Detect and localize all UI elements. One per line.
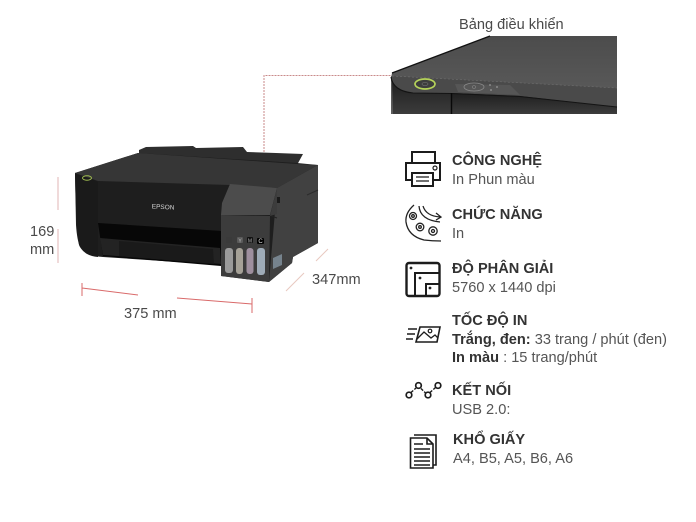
heading: speed: TỐC ĐỘ IN: [452, 313, 527, 329]
rear paper support: [139, 146, 303, 165]
text: paper size value: A4, B5, A5, B6, A6: [453, 451, 573, 467]
printer body: [75, 153, 318, 282]
heading: connection: KẾT NỐI: [452, 383, 511, 399]
heading: resolution: ĐỘ PHÂN GIẢI: [452, 261, 553, 277]
brand: EPSON: [152, 203, 175, 212]
text: resolution value: 5760 x 1440 dpi: [452, 280, 556, 296]
text: technology value: In Phun màu: [452, 172, 535, 188]
ink tank unit: [221, 184, 277, 215]
heading: paper size: KHỔ GIẤY: [453, 432, 525, 448]
text: speed values: Trắng, đen: 33 trang / phút (đen): [452, 332, 667, 348]
printer photo: M: [248, 238, 252, 244]
text: mm: [30, 242, 54, 258]
power button: [82, 176, 92, 180]
depth label: 347mm: [312, 272, 361, 288]
printer photo: C: [258, 239, 263, 245]
front panel: [98, 182, 232, 232]
side panel: [269, 165, 318, 282]
text: function value: In: [452, 226, 464, 242]
text: connection value: USB 2.0:: [452, 402, 510, 418]
heading: technology: CÔNG NGHỆ: [452, 153, 542, 169]
control panel label: Bảng điều khiển: [459, 17, 564, 33]
ink bottles: [225, 248, 233, 273]
text: In màu : 15 trang/phút: [452, 350, 597, 366]
top face: [75, 153, 318, 188]
printer photo: Y: [238, 238, 242, 244]
width label: 375 mm: [124, 306, 177, 322]
left front corner: [75, 174, 98, 257]
height label: 169: [30, 224, 54, 240]
heading: function: CHỨC NĂNG: [452, 207, 543, 223]
